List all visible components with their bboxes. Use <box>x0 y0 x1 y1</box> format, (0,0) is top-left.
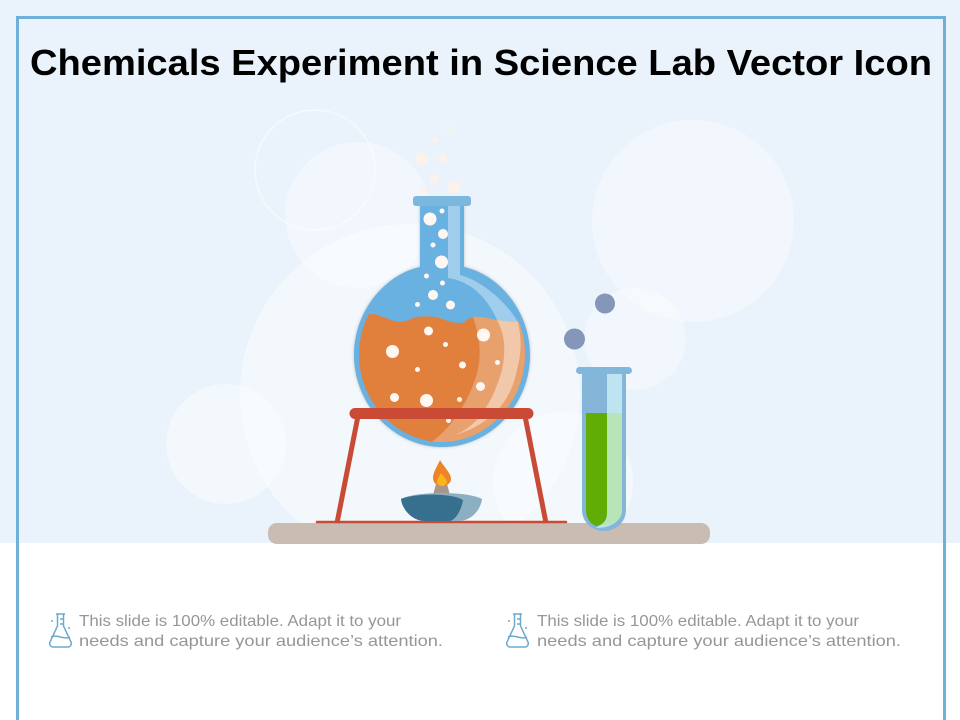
caption text: needs and capture your audience’s attention. <box>79 633 443 650</box>
orange sheen <box>432 316 525 442</box>
test tube <box>576 367 632 531</box>
caption text: needs and capture your audience’s attention. <box>537 633 901 650</box>
orange liquid <box>359 314 525 442</box>
flask glass <box>354 204 530 447</box>
tube rim <box>576 367 632 374</box>
flask shadow <box>354 204 530 447</box>
burner wick <box>433 484 450 495</box>
round bottom flask <box>350 196 540 450</box>
background bubbles <box>240 110 683 523</box>
tripod base line <box>317 521 566 523</box>
burner bowl <box>401 493 482 521</box>
liquid bubbles <box>386 208 500 423</box>
pale green liquid <box>598 413 622 526</box>
flame inner <box>437 473 447 486</box>
flask rim <box>413 196 471 206</box>
tripod top bar <box>355 408 528 419</box>
orange light band <box>448 320 521 437</box>
caption right <box>507 613 901 650</box>
green liquid <box>586 413 607 526</box>
title: Chemicals Experiment in Science Lab Vector Icon <box>30 42 932 83</box>
caption text: This slide is 100% editable. Adapt it to your <box>537 613 860 630</box>
burner <box>401 460 482 521</box>
flame outer <box>433 460 451 486</box>
icon: flask <box>507 614 528 647</box>
rising vapor bubbles <box>416 125 460 194</box>
tripod stand <box>317 414 566 523</box>
background panel <box>0 0 960 543</box>
tube pale highlight <box>596 374 622 528</box>
caption left <box>50 613 443 650</box>
icon: flask <box>50 614 71 647</box>
tube glass <box>582 371 626 531</box>
tripod legs <box>337 416 546 523</box>
burner bowl shade <box>401 495 463 521</box>
table top <box>268 523 710 544</box>
glass highlight <box>448 206 518 322</box>
caption text: This slide is 100% editable. Adapt it to your <box>79 613 402 630</box>
gas bubbles <box>564 294 615 350</box>
